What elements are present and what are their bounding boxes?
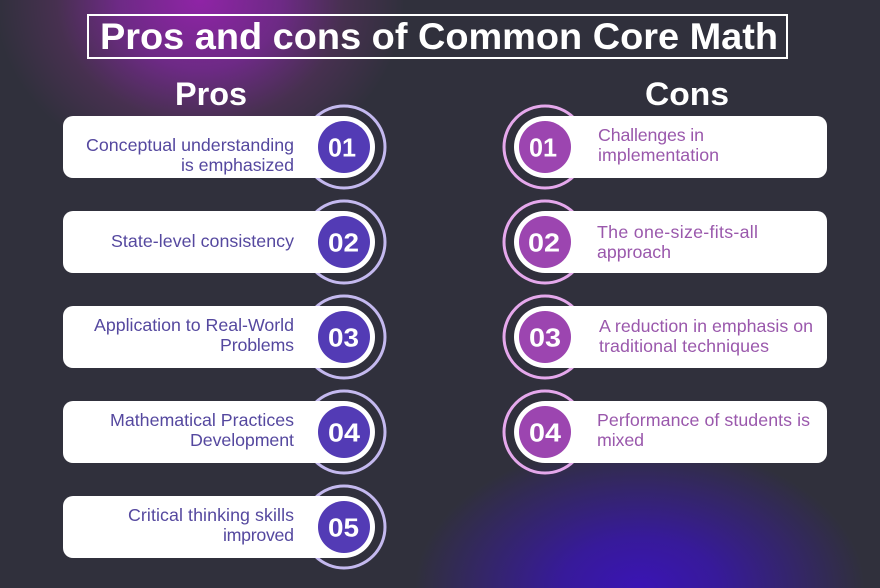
title: Pros and cons of Common Core Math — [100, 16, 778, 57]
pro 03: 03 — [328, 322, 359, 352]
con 03 — [504, 296, 827, 378]
pro 05: Critical thinking skills — [128, 505, 294, 525]
con 01: implementation — [598, 145, 719, 165]
con 04: Performance of students is — [597, 410, 810, 430]
pro 04: 04 — [328, 418, 361, 448]
con 01: Challenges in — [598, 125, 704, 145]
panel: cons list — [504, 106, 827, 473]
pro 03 — [63, 296, 385, 378]
pro 04: Mathematical Practices — [110, 410, 294, 430]
pro 04: Development — [190, 430, 294, 450]
pro 05: 05 — [328, 512, 359, 542]
con 02: The one-size-fits-all — [597, 222, 758, 242]
heading: cons: Cons — [645, 76, 729, 112]
con 03: traditional techniques — [599, 336, 769, 356]
pro 04 — [63, 391, 385, 473]
pro 03: Application to Real-World — [94, 315, 294, 335]
con 01 — [504, 106, 827, 188]
pro 01: Conceptual understanding — [86, 135, 294, 155]
pro 02: State-level consistency — [111, 231, 294, 251]
pro 02 — [63, 201, 385, 283]
pro 02: 02 — [328, 228, 359, 258]
con 01: 01 — [529, 132, 557, 162]
pro 01: is emphasized — [181, 155, 294, 175]
con 04: mixed — [597, 430, 644, 450]
pro 05 — [63, 486, 385, 568]
con 03: 03 — [529, 322, 561, 352]
con 02: 02 — [528, 228, 560, 258]
pro 01: 01 — [328, 132, 356, 162]
pro 05: improved — [223, 525, 294, 545]
con 02 — [504, 201, 827, 283]
con 04 — [504, 391, 827, 473]
pro 01 — [63, 106, 385, 188]
heading: pros: Pros — [175, 76, 247, 112]
con 04: 04 — [529, 418, 562, 448]
pro 03: Problems — [220, 335, 294, 355]
con 03: A reduction in emphasis on — [599, 316, 813, 336]
panel: pros list — [63, 106, 385, 568]
con 02: approach — [597, 242, 671, 262]
